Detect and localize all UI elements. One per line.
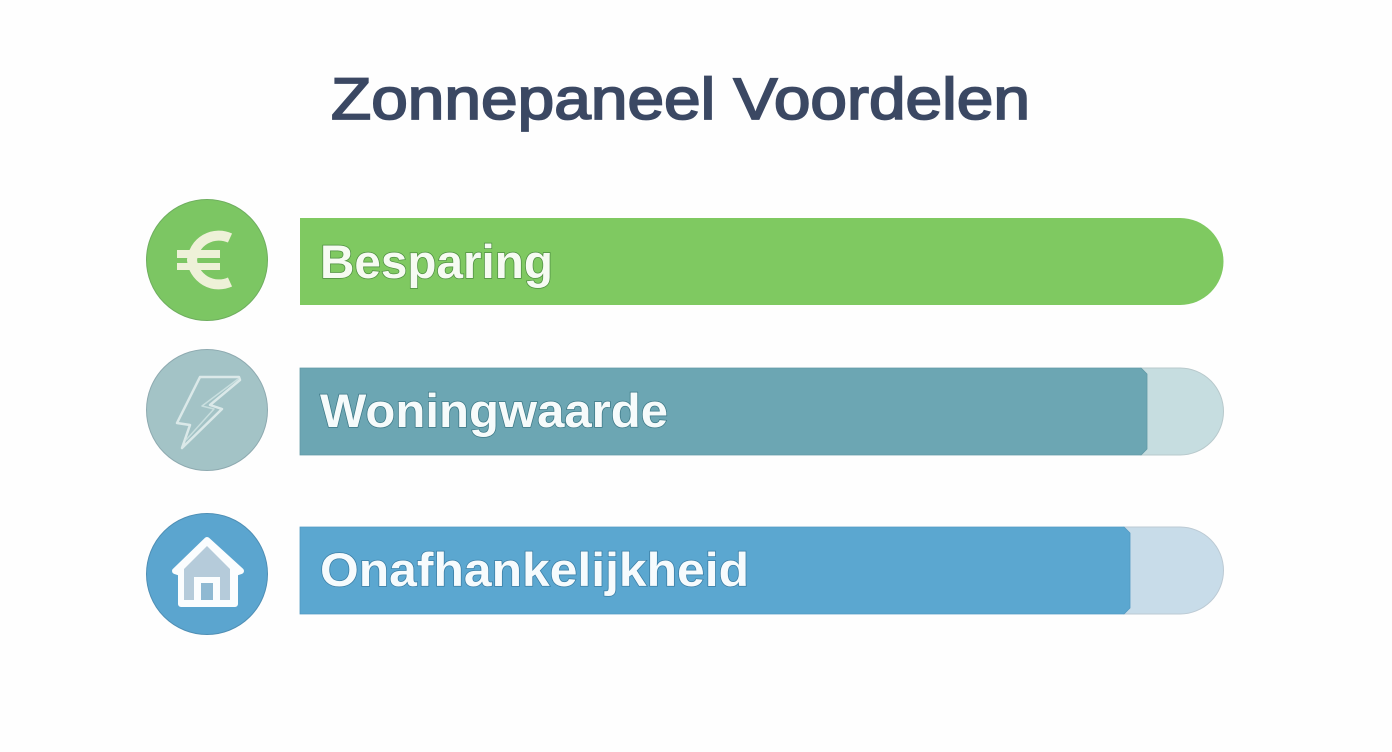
bar: Besparing <box>300 218 1224 305</box>
row: Onafhankelijkheid <box>146 514 1224 634</box>
row: Woningwaarde <box>146 350 1224 470</box>
label: Woningwaarde: Woningwaarde <box>320 384 668 437</box>
icon: euro <box>146 200 268 320</box>
bar track: Onafhankelijkheid <box>1124 527 1224 614</box>
icon: house <box>146 514 268 634</box>
row: Besparing <box>146 200 1224 320</box>
bar: Onafhankelijkheid <box>300 527 1130 614</box>
icon: lightning bolt <box>146 350 268 470</box>
bar: Woningwaarde <box>300 368 1147 455</box>
title: Zonnepaneel Voordelen <box>331 67 1030 132</box>
label: Besparing: Besparing <box>320 235 553 288</box>
label: Onafhankelijkheid: Onafhankelijkheid <box>320 543 749 596</box>
bar track: Woningwaarde <box>1141 368 1224 455</box>
